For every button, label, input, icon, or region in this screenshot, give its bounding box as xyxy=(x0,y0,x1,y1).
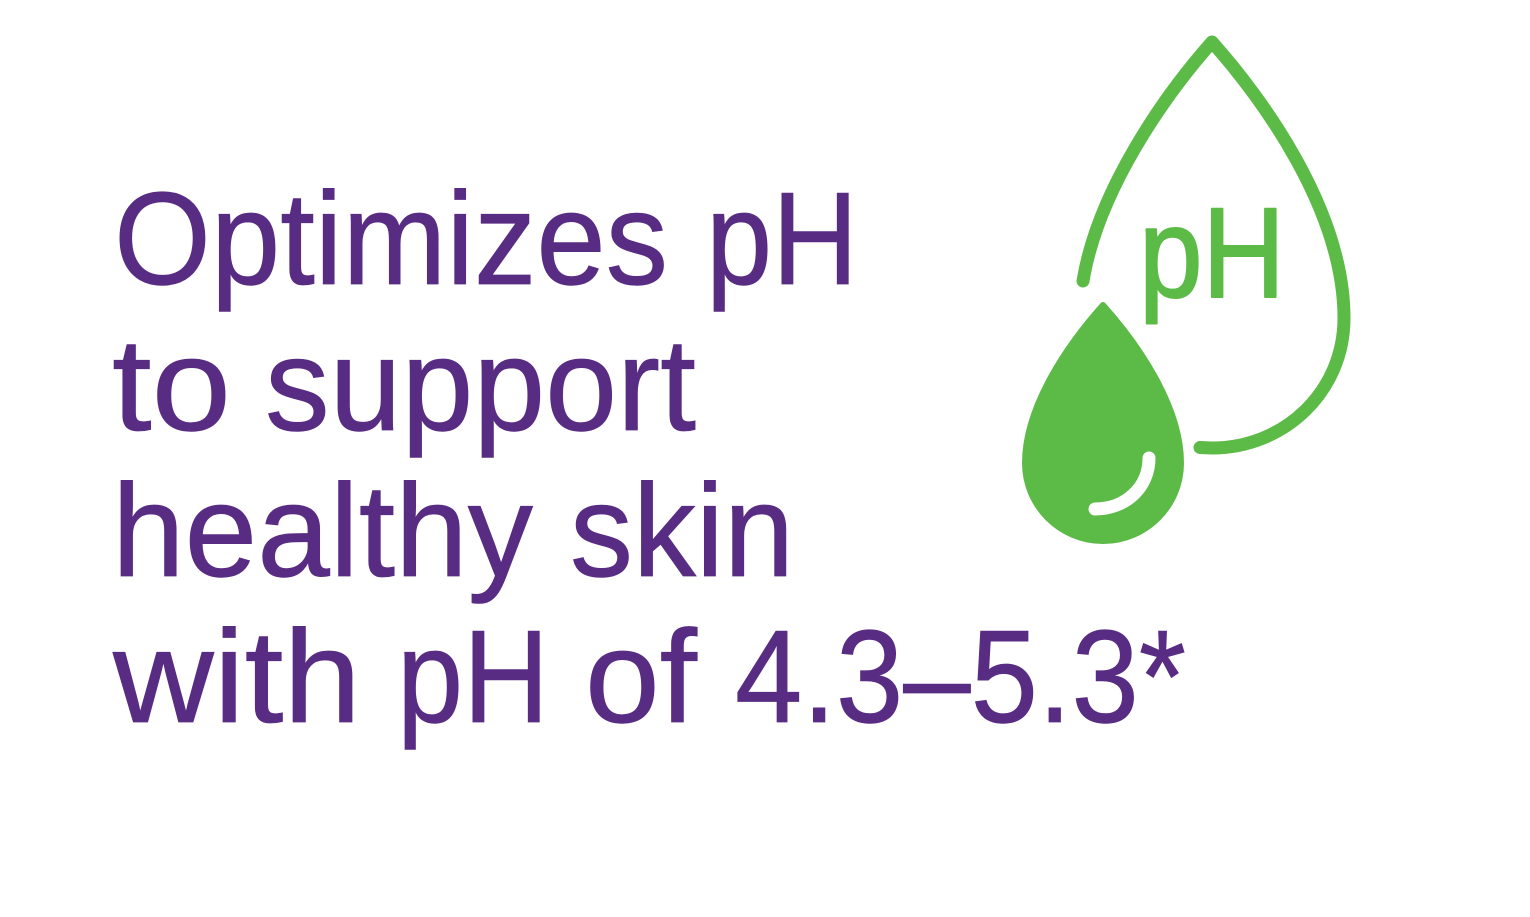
headline line 4: with xyxy=(112,603,361,750)
headline line 3: healthy xyxy=(112,457,533,604)
headline line 3: skin xyxy=(570,457,794,604)
headline line 2: to xyxy=(112,311,231,458)
headline text xyxy=(112,165,1186,750)
icon: drop highlight xyxy=(1095,458,1149,509)
headline line 4 xyxy=(112,603,1186,750)
headline line 1: Optimizes xyxy=(114,165,668,312)
headline line 3 xyxy=(112,457,794,604)
headline line 1: pH xyxy=(706,165,858,312)
icon: pH water drops xyxy=(1025,42,1344,541)
headline line 2: support xyxy=(265,311,696,458)
icon: pH label: pH xyxy=(1139,182,1285,325)
icon: large outlined drop xyxy=(1083,42,1344,448)
icon: small solid drop xyxy=(1025,305,1181,541)
headline line 4: 4.3–5.3* xyxy=(735,603,1186,750)
headline line 4: pH xyxy=(397,603,549,750)
headline line 4: of xyxy=(585,603,697,750)
